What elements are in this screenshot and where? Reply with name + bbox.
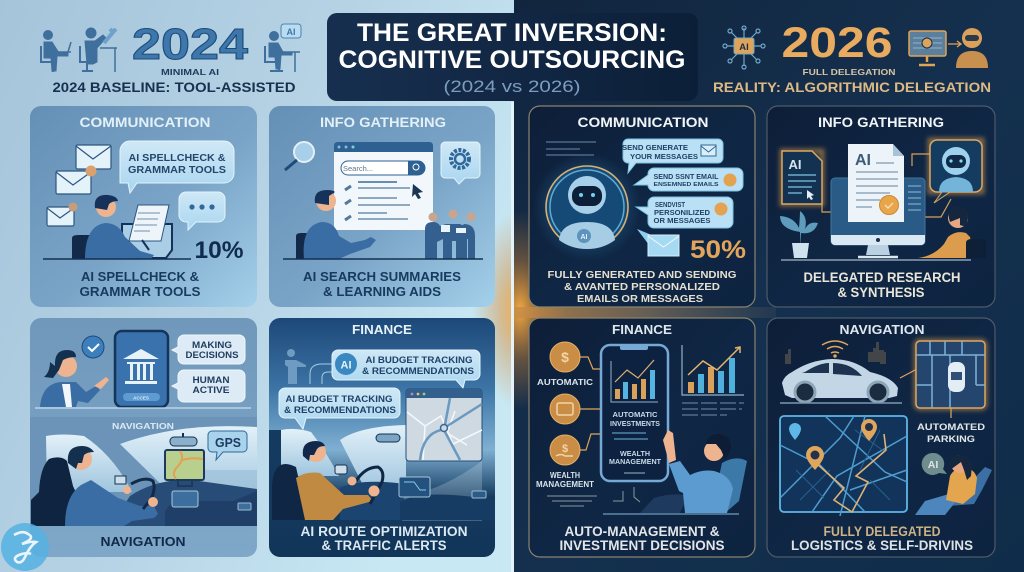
route map [780, 416, 907, 516]
panel: 2024 info gathering [269, 106, 495, 307]
phone: WEALTH [620, 451, 650, 458]
icon: hand coin: $ [562, 443, 568, 455]
callout: budget tracking lower: AI BUDGET TRACKING [286, 394, 392, 405]
heading: FINANCE [352, 322, 412, 337]
connectors [580, 357, 601, 450]
message: send sent: SEND SSNT EMAIL [654, 174, 719, 181]
main AI document: AI [855, 152, 871, 169]
icon: AI document: AI [788, 157, 802, 172]
stat: 50 percent: 50% [690, 236, 746, 264]
panel: 2026 finance [529, 318, 755, 557]
decorative text lines [546, 142, 596, 155]
message: personalized: SENDVIST [655, 202, 686, 209]
ground line [43, 258, 191, 260]
phone chart [611, 360, 658, 402]
message: send generate [622, 139, 723, 173]
figure: person at monitor [918, 206, 986, 258]
icon: magnifier [285, 142, 314, 170]
stat: 10 percent: 10% [194, 237, 244, 264]
label: navigation: NAVIGATION [112, 421, 174, 431]
logo [1, 523, 49, 571]
main AI document [848, 144, 904, 222]
icon: person with AI bubble: AI [286, 27, 296, 37]
caption [804, 270, 960, 300]
map window [406, 389, 482, 461]
heading: INFO GATHERING [320, 115, 446, 130]
caption: FULLY GENERATED AND SENDING [548, 269, 736, 281]
caption: INVESTMENT DECISIONS [560, 538, 724, 553]
caption: FULLY DELEGATED [824, 524, 941, 539]
title line 1: THE GREAT INVERSION: [357, 19, 667, 47]
panel: 2026 navigation [767, 318, 995, 557]
robot in ring: AI [580, 234, 588, 241]
callout: AI spellcheck [120, 141, 234, 193]
phone: MANAGEMENT [609, 459, 662, 466]
callout: budget tracking lower: & RECOMMENDATIONS [284, 405, 396, 416]
figure: woman pointing [40, 350, 109, 407]
label: minimal AI: MINIMAL AI [161, 67, 219, 77]
icon: hand coin [550, 435, 580, 465]
decorative lines [547, 487, 640, 506]
callout: GPS: GPS [215, 436, 241, 450]
driver [65, 480, 158, 526]
message: send generate: SEND GENERATE [622, 143, 688, 152]
caption: & SYNTHESIS [838, 285, 924, 300]
callout: budget tracking top [332, 350, 480, 388]
heading: INFO GATHERING [818, 115, 944, 130]
phone: AUTOMATIC [612, 412, 658, 419]
icon: AI chip [723, 26, 765, 69]
skyline [785, 342, 886, 364]
figure: driver in orange [272, 441, 383, 520]
icon: nav screen [165, 450, 204, 486]
icon: dollar coin [550, 342, 580, 372]
caption [548, 269, 736, 305]
panel: 2024 decisions and navigation [30, 318, 257, 557]
title line 2: COGNITIVE OUTSOURCING [338, 46, 686, 74]
caption: AI ROUTE OPTIMIZATION [300, 524, 468, 539]
panel: 2024 communication [30, 106, 257, 307]
figure: group of people [425, 210, 476, 259]
callout: GPS [208, 431, 247, 460]
label: wealth management [536, 470, 594, 489]
callout: AI [922, 453, 947, 475]
ground line [780, 402, 902, 404]
caption: AI SEARCH SUMMARIES [303, 269, 461, 284]
icon: monitor to robot [909, 28, 988, 68]
caption: EMAILS OR MESSAGES [577, 293, 703, 305]
caption: DELEGATED RESEARCH [804, 270, 960, 285]
label: automatic: AUTOMATIC [537, 377, 593, 387]
robot in ring [533, 153, 641, 261]
callout: human active: HUMAN [192, 375, 230, 385]
figure: woman relaxing [915, 455, 992, 515]
parking glow [916, 341, 985, 408]
callout: human active [172, 370, 245, 402]
phone with bank [115, 331, 168, 407]
ground line [603, 513, 739, 515]
caption: AI SPELLCHECK & [81, 269, 199, 284]
title block [327, 13, 698, 101]
callout: typing dots [179, 192, 225, 230]
panel: 2026 communication [529, 106, 755, 307]
car interior [269, 425, 495, 521]
callout: budget tracking top: AI BUDGET TRACKING [366, 355, 472, 366]
heading: reality: REALITY: ALGORITHMIC DELEGATION [713, 79, 991, 95]
map pins [806, 446, 824, 470]
header: 2026 reality [713, 19, 991, 95]
phone with bank: ACCES [133, 396, 149, 400]
callout: check [82, 336, 104, 358]
caption [80, 269, 201, 299]
message: send sent [634, 168, 743, 191]
callout: making decisions: DECISIONS [186, 350, 238, 360]
icon: AI document [782, 151, 822, 204]
ground line [781, 259, 971, 261]
icon: AI chip: AI [739, 42, 749, 53]
label: automated parking: AUTOMATED [917, 422, 985, 433]
dashboard [110, 479, 257, 526]
message: personalized: PERSONILIZED [654, 210, 710, 217]
caption: NAVIGATION [100, 535, 186, 549]
subtitle: (2024 vs 2026) [444, 77, 580, 96]
phone [601, 345, 668, 481]
icon: envelopes [47, 145, 111, 226]
message: personalized [636, 197, 733, 228]
callout: AI spellcheck: GRAMMAR TOOLS [128, 165, 226, 176]
callout: making decisions [172, 335, 245, 364]
parking view [916, 341, 985, 408]
callout: AI spellcheck: AI SPELLCHECK & [128, 153, 226, 164]
amber glow behind cards [782, 140, 982, 204]
self-driving car [782, 359, 898, 402]
year 2026: 2026 [782, 19, 892, 67]
label: automated parking [917, 422, 985, 445]
label: wealth management: MANAGEMENT [536, 480, 594, 489]
panel: 2026 info gathering [767, 106, 995, 307]
callout: budget tracking top: AI [340, 360, 352, 372]
figure: person at path [285, 349, 342, 384]
callout: AI: AI [928, 459, 938, 471]
caption: & LEARNING AIDS [323, 284, 441, 299]
ground line [283, 258, 483, 260]
browser window [334, 142, 433, 230]
callout: budget tracking lower [279, 388, 400, 429]
icon: person at desk [41, 30, 71, 72]
caption: AUTO-MANAGEMENT & [564, 524, 720, 539]
callout: making decisions: MAKING [192, 340, 232, 350]
label: automated parking: PARKING [927, 434, 975, 445]
figure: person gesturing [296, 190, 376, 259]
caption [560, 524, 724, 553]
caption: & TRAFFIC ALERTS [322, 538, 446, 553]
caption [303, 269, 461, 299]
label: wealth management: WEALTH [550, 470, 580, 480]
heading: NAVIGATION [840, 322, 924, 337]
caption: GRAMMAR TOOLS [80, 284, 201, 299]
message: personalized: OR MESSAGES [654, 218, 711, 225]
background: 2026 side [514, 0, 1024, 572]
plant [780, 211, 818, 258]
caption [300, 524, 468, 553]
connector lines [822, 154, 951, 217]
icon: person with AI bubble [265, 24, 301, 72]
icon: wallet coin [550, 394, 580, 424]
heading: COMMUNICATION [578, 115, 708, 130]
center divider glow [472, 210, 568, 410]
icon: wifi signal [822, 341, 848, 357]
figure: person with laptop [72, 195, 172, 259]
icon: dollar coin: $ [561, 349, 569, 365]
heading: FINANCE [612, 322, 672, 337]
figure: relaxed man [640, 430, 747, 513]
scene: driver in car [31, 426, 257, 526]
robot callout [930, 140, 982, 203]
heading: 2024 baseline: 2024 BASELINE: TOOL-ASSISTED [52, 79, 296, 95]
year 2024: 2024 [132, 20, 249, 69]
connector [900, 369, 951, 418]
heading: COMMUNICATION [80, 115, 210, 130]
callout: budget tracking top: & RECOMMENDATIONS [362, 366, 474, 377]
background: 2024 side [0, 0, 514, 572]
monitor [831, 178, 925, 257]
seat [31, 457, 91, 526]
bar chart [682, 345, 744, 415]
message: send generate: YOUR MESSAGES [630, 152, 698, 161]
caption: LOGISTICS & SELF-DRIVINS [791, 538, 973, 553]
icon: glowing envelope [637, 229, 679, 256]
header: 2024 baseline [41, 20, 301, 95]
browser window: Search... [343, 164, 373, 173]
caption [791, 524, 973, 553]
navigation band [30, 417, 257, 526]
icon: person with wrench [80, 28, 117, 72]
phone: INVESTMENTS [610, 421, 660, 428]
label: full delegation: FULL DELEGATION [802, 67, 896, 77]
panel: 2024 finance [269, 318, 495, 557]
callout: gear [441, 142, 480, 184]
callout: human active: ACTIVE [192, 385, 230, 395]
caption: & AVANTED PERSONALIZED [564, 281, 720, 293]
message: send sent: ENSEMNED EMAILS [654, 182, 719, 188]
